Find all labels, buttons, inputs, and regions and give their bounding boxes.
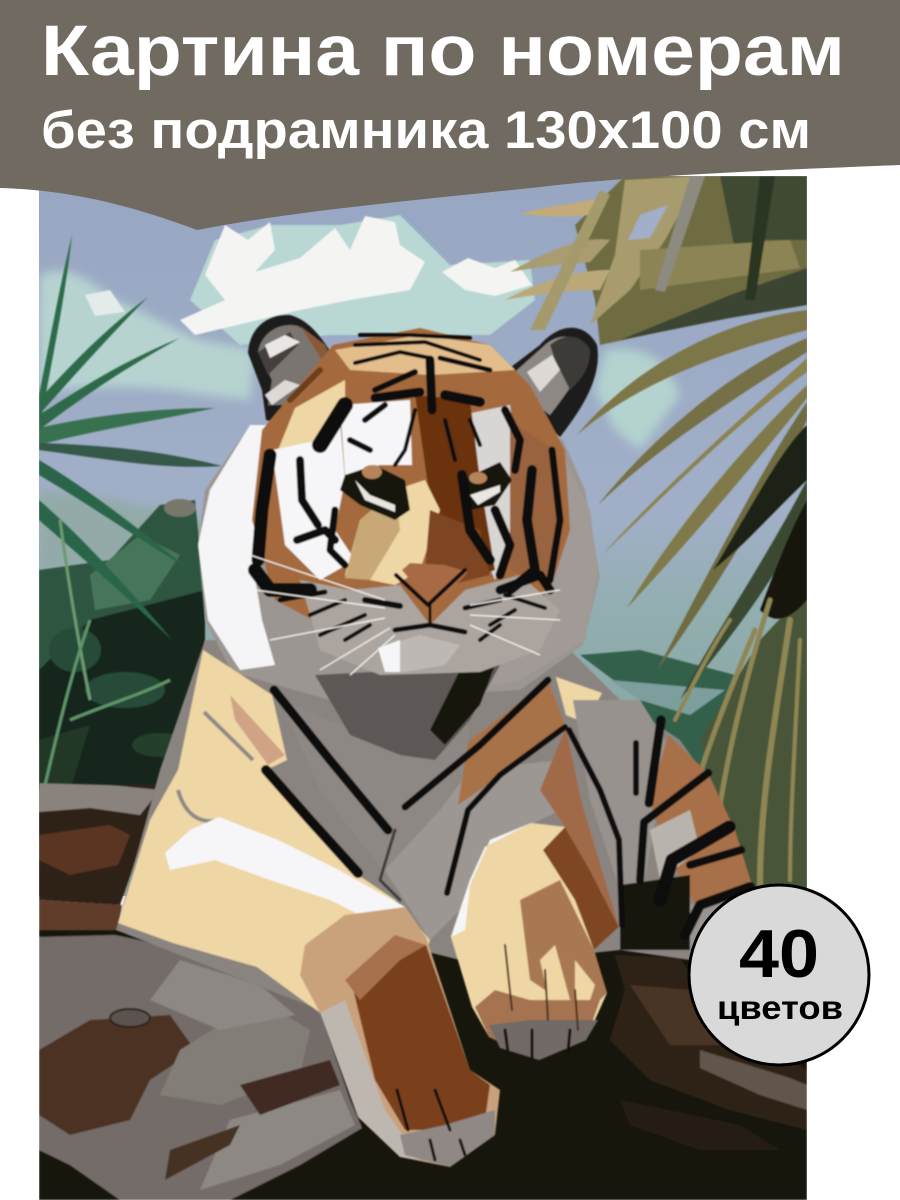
ears <box>248 315 598 437</box>
green bush <box>39 499 203 670</box>
central face brown <box>415 395 495 590</box>
subtitle: без подрамника 130х100 см <box>41 101 811 160</box>
sky background <box>39 176 807 896</box>
upper left log <box>39 785 160 905</box>
clouds <box>39 215 680 570</box>
badge: colour count: 40 <box>739 916 819 992</box>
white and grey ruff <box>198 420 600 700</box>
dark lower foliage <box>700 590 807 900</box>
left palm and bushes <box>39 235 222 790</box>
right chest orange <box>458 680 566 805</box>
right palm fronds <box>505 176 807 900</box>
right flank orange <box>650 735 752 905</box>
palm leaves <box>39 235 72 430</box>
grey body base <box>116 640 752 1010</box>
painting: tiger on a log <box>39 176 807 1200</box>
chest grey and black bib <box>332 754 466 833</box>
forehead cream <box>335 335 515 375</box>
cream shoulder and foreleg <box>118 650 430 1013</box>
head base <box>252 328 570 650</box>
whiskers <box>250 555 560 675</box>
black ground <box>39 930 807 1200</box>
nose <box>402 563 468 602</box>
right paw <box>451 823 619 1060</box>
eyes <box>340 462 512 520</box>
cheeks white <box>272 420 355 580</box>
grey log <box>39 935 362 1200</box>
left arm brown paw <box>300 907 500 1167</box>
chin <box>400 635 460 672</box>
long fronds <box>577 310 807 435</box>
top frond mass <box>575 176 807 345</box>
nose bridge cream <box>345 480 440 585</box>
right log <box>610 955 807 1130</box>
stripes <box>255 335 750 1160</box>
badge: colour count <box>689 885 869 1065</box>
tiger <box>116 315 752 1167</box>
title: Картина по номерам <box>41 12 845 91</box>
badge: colour count: цветов <box>717 989 843 1026</box>
distant trees and water <box>580 649 734 788</box>
banner <box>0 0 900 230</box>
lower vertical blades <box>675 600 800 885</box>
muzzle <box>300 575 560 675</box>
log and dark ground <box>39 783 807 1200</box>
